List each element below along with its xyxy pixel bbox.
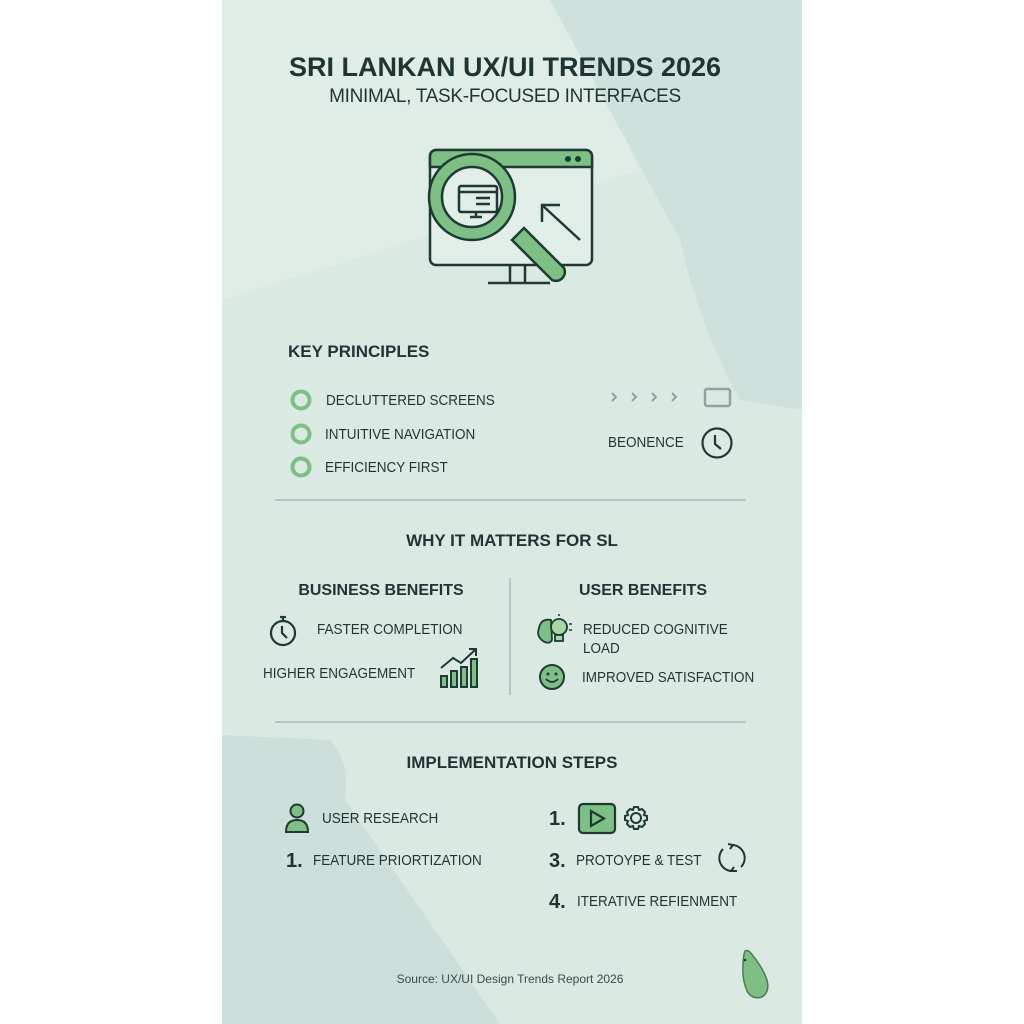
panel: user benefits: IMPROVED SATISFACTION <box>582 669 754 686</box>
list: principles: INTUITIVE NAVIGATION <box>325 426 475 443</box>
list: principles: DECLUTTERED SCREENS <box>326 392 495 409</box>
panel: business benefits: HIGHER ENGAGEMENT <box>263 665 415 682</box>
steps: right column: 3. <box>549 850 566 872</box>
label: sequence with clock: BEONENCE <box>608 434 684 451</box>
subtitle: MINIMAL, TASK-FOCUSED INTERFACES <box>329 86 681 107</box>
steps: right column: ITERATIVE REFIENMENT <box>577 893 737 910</box>
panel: user benefits: REDUCED COGNITIVE <box>583 621 728 638</box>
icon: monitor with magnifier <box>428 148 594 284</box>
list: principles: EFFICIENCY FIRST <box>325 459 448 476</box>
steps: right column: 1. <box>549 808 566 830</box>
heading: implementation steps: IMPLEMENTATION STEPS <box>407 753 617 772</box>
panel: user benefits <box>537 582 754 690</box>
heading: why it matters: WHY IT MATTERS FOR SL <box>406 531 618 550</box>
heading: key principles: KEY PRINCIPLES <box>288 342 429 361</box>
steps: left column <box>285 804 482 872</box>
panel: business benefits: FASTER COMPLETION <box>317 621 463 638</box>
label: sequence with clock <box>608 427 733 459</box>
steps: right column: 4. <box>549 891 566 913</box>
panel: user benefits: USER BENEFITS <box>579 582 707 599</box>
icon: sri lanka map <box>742 950 769 998</box>
steps: right column: PROTOYPE & TEST <box>576 852 702 869</box>
panel: user benefits: LOAD <box>583 640 620 657</box>
list: principles <box>290 390 495 478</box>
steps: left column: USER RESEARCH <box>322 810 438 827</box>
title: SRI LANKAN UX/UI TRENDS 2026 <box>289 52 721 82</box>
icon: chevrons and screen <box>611 388 732 408</box>
steps: right column <box>549 802 746 913</box>
steps: left column: 1. <box>286 850 303 872</box>
panel: business benefits <box>263 582 478 688</box>
panel: business benefits: BUSINESS BENEFITS <box>298 582 464 599</box>
source: Source: UX/UI Design Trends Report 2026 <box>397 972 623 986</box>
steps: left column: FEATURE PRIORTIZATION <box>313 852 482 869</box>
